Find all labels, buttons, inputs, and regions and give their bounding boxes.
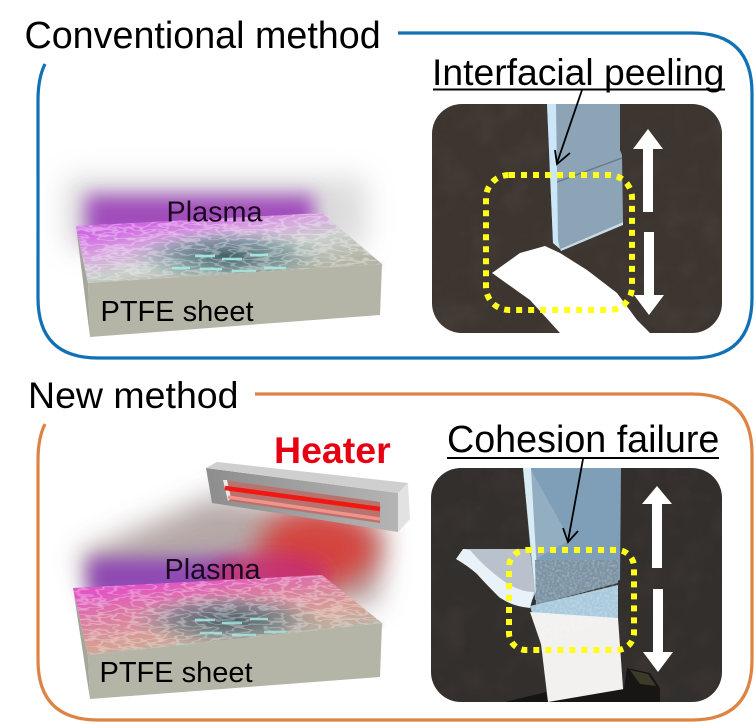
plasma glow: conventional — [86, 195, 314, 241]
heading: conventional method: Conventional method — [24, 14, 381, 56]
heat glow: red core — [258, 508, 378, 588]
panel border: conventional — [38, 33, 752, 358]
illustration: PTFE sheet, conventional — [70, 210, 386, 337]
illustration: PTFE sheet, new method — [70, 572, 386, 699]
arrows: pull direction, conventional — [633, 129, 664, 315]
panel: conventional method — [24, 14, 752, 358]
panel border: new method — [38, 394, 752, 720]
callout arrow: interfacial peeling — [555, 90, 582, 164]
highlight box: failure region — [509, 550, 634, 650]
heat glow — [78, 495, 385, 605]
heading: new method: New method — [28, 374, 239, 416]
label: heater: Heater — [274, 429, 391, 471]
label: plasma, conventional: Plasma — [166, 196, 264, 228]
halo: conventional plasma — [66, 178, 366, 248]
heading: interfacial peeling: Interfacial peeling — [432, 51, 724, 93]
photo: interfacial peeling specimen — [432, 104, 722, 333]
highlight box: peeling region — [486, 175, 632, 310]
photo: cohesion failure specimen — [431, 468, 722, 702]
label: PTFE sheet, new method: PTFE sheet — [100, 657, 253, 689]
label: PTFE sheet, conventional: PTFE sheet — [100, 296, 254, 328]
icon: heater unit — [206, 462, 410, 532]
pink glow — [210, 553, 330, 597]
label: plasma, new method: Plasma — [164, 554, 262, 586]
plasma glow: new method — [88, 558, 238, 600]
callout arrow: cohesion failure — [563, 459, 583, 542]
heading: cohesion failure: Cohesion failure — [447, 418, 719, 460]
panel: new method — [28, 374, 752, 720]
arrows: pull direction, new method — [642, 486, 673, 672]
